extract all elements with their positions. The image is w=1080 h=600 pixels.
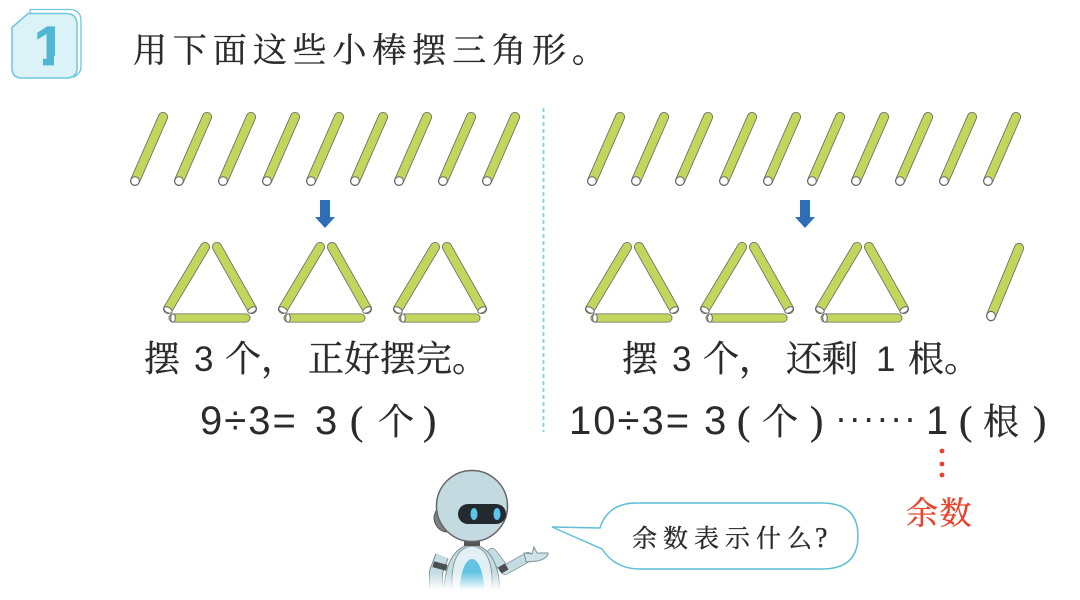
speech bubble text: ? (815, 523, 827, 554)
speech bubble text: 余数表示什么 (632, 525, 818, 553)
left caption: 3 (194, 340, 213, 379)
right equation: ( (737, 398, 750, 443)
left equation: 个 (378, 402, 414, 442)
icon: number 1 badge: 1 (34, 14, 65, 77)
left equation: 9÷3= (200, 399, 298, 443)
left equation: ) (423, 398, 436, 443)
speech bubble (552, 503, 858, 569)
right equation: 根 (983, 402, 1019, 442)
right group: three triangles (585, 247, 909, 322)
right caption: 3 (672, 340, 691, 379)
right group: ten sticks (588, 117, 1016, 185)
right caption: 个， (703, 339, 775, 379)
right caption: 根。 (908, 339, 980, 379)
icon: robot (425, 470, 548, 600)
left caption: 正好摆完。 (308, 339, 488, 379)
title: 用下面这些小棒摆三角形。 (133, 32, 612, 70)
left caption: 摆 (144, 339, 180, 379)
arrow: right down arrow (795, 200, 815, 228)
right equation: 个 (762, 402, 798, 442)
remainder label: 余数 (906, 495, 973, 531)
divider line (542, 108, 544, 432)
left caption: 个， (225, 339, 297, 379)
remainder dotted pointer (940, 449, 944, 477)
icon: number 1 badge (12, 10, 81, 78)
right caption: 还剩 (786, 339, 858, 379)
right equation: 3 (704, 399, 726, 443)
right caption: 1 (876, 340, 895, 379)
right equation: ······ (835, 397, 918, 438)
right caption: 摆 (622, 339, 658, 379)
left group: three triangles (163, 247, 487, 322)
left equation: ( (350, 398, 363, 443)
left group: nine sticks (131, 117, 515, 185)
arrow: left down arrow (315, 200, 335, 228)
leftover stick (987, 248, 1019, 321)
right equation: ) (1033, 398, 1046, 443)
right equation: ( (959, 398, 972, 443)
right equation: 1 (926, 399, 948, 443)
left equation: 3 (315, 399, 337, 443)
right equation: ) (810, 398, 823, 443)
right equation: 10÷3= (569, 399, 691, 443)
